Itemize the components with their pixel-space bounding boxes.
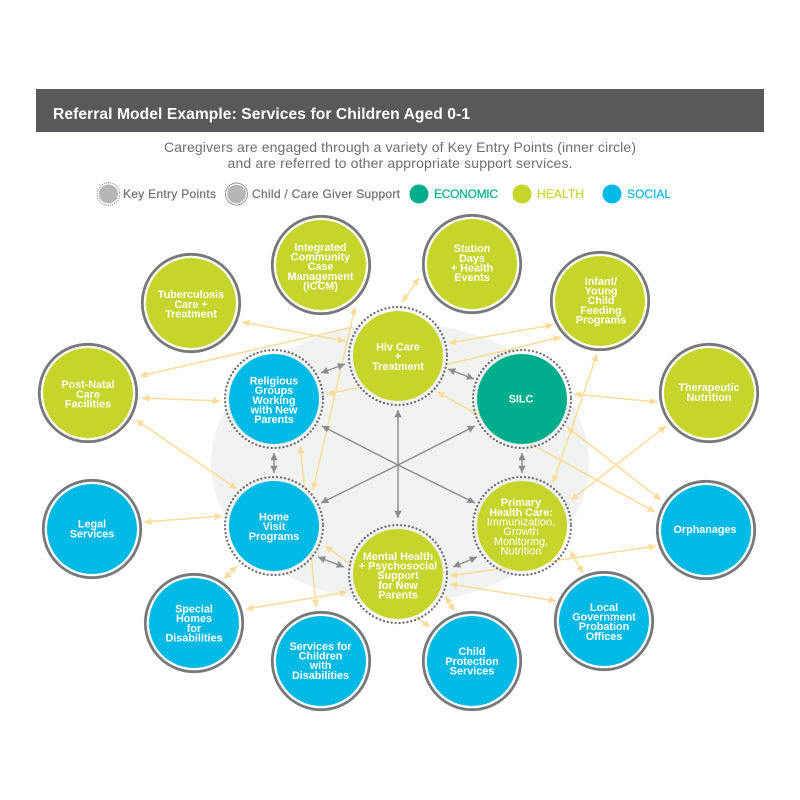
service: services for children: Children [299, 650, 342, 662]
background ellipse [211, 323, 589, 603]
service: legal [43, 480, 141, 578]
service: iccm: Management [288, 271, 354, 283]
arrow: legal to home visit [144, 516, 222, 522]
service: post-natal: Care [76, 389, 100, 401]
service: therapeutic nutrition: Nutrition [687, 392, 731, 404]
legend: child / care giver support [226, 183, 401, 205]
outer service circles [39, 215, 758, 710]
service: local government: Probation [579, 621, 629, 633]
key entry: religious groups: with New [250, 404, 298, 416]
arrow: mental health to child protection [446, 596, 454, 611]
key entry: home visit: Visit [263, 521, 286, 533]
gray key entry point arrows [274, 364, 522, 567]
arrow: home visit to religious groups [300, 446, 305, 490]
legend: economic [410, 184, 498, 204]
key entry: primary health care: Immunization, [487, 516, 555, 528]
key entry: religious groups: Groups [255, 385, 293, 397]
arrow: primary health care to local government [570, 551, 583, 573]
arrow: mental health to child protection, second [415, 617, 430, 627]
key entry: mental health: + Psychosocial [359, 560, 437, 572]
service: special homes [145, 574, 243, 672]
service: infant feeding: Young [585, 286, 617, 298]
key entry: primary health care [473, 477, 571, 575]
legend: social [602, 184, 671, 204]
legend: key entry points: Key Entry Points [123, 187, 216, 201]
arrow: hub to silc [398, 426, 475, 465]
service: infant feeding: Programs [576, 314, 626, 326]
service: services for children: Services for [290, 641, 352, 653]
service: special homes: Homes [176, 613, 212, 625]
service: iccm: Integrated [294, 242, 347, 254]
arrow: silc to primary health care [521, 453, 523, 473]
arrow: hiv care to silc [448, 369, 474, 379]
service: tuberculosis: Treatment [165, 308, 217, 320]
service: child protection [423, 612, 521, 710]
service: station days: + Health [451, 262, 493, 274]
service: iccm: (ICCM) [303, 280, 338, 292]
service: local government [555, 572, 653, 670]
key entry: primary health care: Primary [501, 497, 541, 509]
key entry: silc: SILC [509, 394, 533, 406]
key entry: hiv care [349, 307, 447, 405]
key entry: primary health care: Health Care: [489, 507, 553, 519]
key entry: mental health: Mental Health [363, 551, 433, 563]
key entry: primary health care: Nutrition [501, 546, 541, 558]
arrow: hub to hiv care [397, 410, 399, 465]
arrow: hub to home visit [321, 465, 398, 503]
service: child protection: Protection [445, 656, 499, 668]
intro text [164, 139, 636, 171]
arrow: hiv care to infant feeding, second [445, 337, 561, 365]
key entry: home visit [225, 477, 323, 575]
arrow: special homes to home visit [224, 566, 237, 579]
key entry: primary health care: Monitoring, [494, 536, 548, 548]
legend: social: SOCIAL [627, 187, 671, 201]
key entry: hiv care: Hiv Care [376, 342, 420, 354]
service: tuberculosis: Tuberculosis [158, 289, 224, 301]
arrow: silc to orphanages [567, 427, 661, 500]
service: local government: Offices [586, 631, 622, 643]
key entry: silc [473, 350, 571, 448]
key entry: hiv care: Treatment [372, 361, 424, 373]
arrow: primary health care to therapeutic nutrition [571, 426, 666, 500]
key entry: mental health: Support [377, 570, 419, 582]
key entry: home visit: Home [259, 512, 289, 524]
arrow: post-natal to home visit [136, 420, 237, 489]
arrow: mental health to local government [450, 584, 556, 601]
service: station days: Days [459, 253, 485, 265]
key entry: religious groups [225, 350, 323, 448]
service: post-natal: Facilities [65, 398, 111, 410]
arrow: silc to therapeutic nutrition [574, 394, 657, 402]
key entry point circles [225, 307, 571, 623]
service: orphanages [657, 481, 755, 579]
key entry: religious groups: Parents [254, 414, 294, 426]
service: therapeutic nutrition: Therapeutic [678, 382, 740, 394]
service: post-natal: Post-Natal [61, 379, 115, 391]
service: services for children: with [309, 660, 331, 672]
service: infant feeding: Child [588, 295, 614, 307]
service: infant feeding: Feeding [580, 305, 622, 317]
service: special homes: Special [175, 604, 213, 616]
service: special homes: for [187, 623, 202, 635]
legend: health: HEALTH [537, 187, 584, 201]
service: station days: Station [454, 243, 490, 255]
service: child protection: Child [458, 646, 486, 658]
key entry: religious groups: Religious [250, 376, 298, 388]
service: station days [423, 215, 521, 313]
arrow: mental health to home visit [325, 546, 352, 565]
arrow: hub to primary health care [398, 465, 475, 503]
legend [97, 183, 671, 205]
service: child protection: Services [450, 666, 494, 678]
arrow: religious groups to hiv care [321, 364, 345, 373]
service: legal: Legal [78, 518, 106, 530]
arrow: post-natal to religious groups [142, 398, 220, 401]
intro text: Caregivers are engaged through a variety of Key Entry Points (inner circle) [164, 139, 636, 155]
legend: key entry points [97, 183, 216, 205]
service: legal: Services [70, 528, 114, 540]
arrow: hiv care to station days [402, 278, 419, 302]
service: local government: Local [590, 602, 618, 614]
title: Referral Model Example: Services for Children Aged 0-1 [53, 106, 470, 123]
key entry: primary health care: Growth [503, 526, 539, 538]
service: services for children [272, 612, 370, 710]
legend: health [512, 184, 584, 204]
arrow: hiv care to religious groups [327, 387, 360, 394]
service: orphanages: Orphanages [674, 524, 736, 536]
service: therapeutic nutrition [660, 344, 758, 442]
arrow: post-natal to hiv care [140, 327, 353, 376]
service: station days: Events [454, 272, 490, 284]
arrow: mental health to primary health care [453, 557, 477, 567]
legend: child / care giver support: Child / Care Giver Support [252, 187, 401, 201]
arrow: hiv care to orphanages [437, 392, 655, 512]
service: local government: Government [572, 612, 636, 624]
intro text: and are referred to other appropriate support services. [228, 155, 572, 171]
arrow: hub to mental health [397, 465, 399, 518]
service: iccm: Community [291, 252, 350, 264]
key entry: mental health: for New [378, 580, 418, 592]
arrow: mental health to orphanages [450, 546, 656, 576]
legend: economic: ECONOMIC [434, 187, 498, 201]
arrow: tuberculosis to hiv care [242, 322, 345, 341]
key entry: hiv care: + [395, 351, 401, 363]
key entry: religious groups: Working [252, 395, 296, 407]
arrow: religious groups to home visit [273, 453, 275, 473]
yellow referral arrows [136, 278, 666, 627]
arrow: home visit to mental health [318, 557, 344, 567]
key entry: mental health: Parents [378, 590, 418, 602]
service: infant feeding [551, 252, 649, 350]
arrow: iccm to home visit [313, 307, 355, 490]
arrow: special homes to mental health [246, 592, 347, 609]
service: tuberculosis: Care + [174, 299, 208, 311]
arrow: hiv care to infant feeding [449, 325, 553, 343]
key entry: home visit: Programs [249, 531, 299, 543]
service: infant feeding: Infant/ [585, 276, 617, 288]
service: special homes: Disabilities [165, 632, 223, 644]
service: iccm [272, 216, 370, 314]
service: post-natal [39, 344, 137, 442]
service: tuberculosis [142, 254, 240, 352]
arrow: home visit to services for children [311, 553, 316, 607]
arrow: infant feeding to primary health care [553, 354, 597, 483]
title bar [36, 89, 764, 132]
key entry: mental health [349, 525, 447, 623]
arrow: hub to religious groups [322, 426, 398, 465]
service: services for children: Disabilities [292, 670, 349, 682]
service: iccm: Case [308, 261, 333, 273]
